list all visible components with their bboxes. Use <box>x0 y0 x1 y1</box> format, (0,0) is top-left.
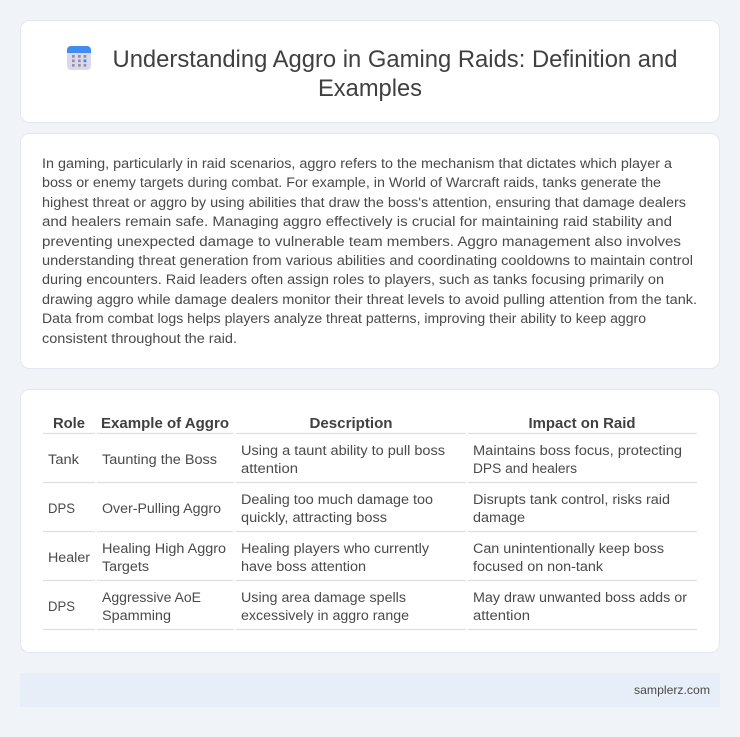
table row: dps aoe: Using area damage spells <box>241 590 406 606</box>
panel: intro paragraph <box>20 134 720 368</box>
text block: aggro explanation <box>42 156 697 347</box>
table row: dps aoe: Spamming <box>102 608 171 624</box>
table header: Example of Aggro <box>101 415 229 432</box>
table header: Role <box>53 415 85 432</box>
table row: dps over-pulling: quickly, attracting boss <box>241 510 387 526</box>
table row: dps over-pulling: Disrupts tank control, risks raid <box>473 492 670 508</box>
title: Examples <box>318 75 422 102</box>
text block: aggro explanation: In gaming, particularly in raid scenarios, aggro refers to the mechanism that dictates which player a <box>42 156 672 172</box>
text block: aggro explanation: during encounters. Raid leaders often assign roles to players, such as tanks focusing primarily on <box>42 272 664 288</box>
table row: healer: Healing High Aggro <box>102 541 226 557</box>
title <box>112 46 678 102</box>
table row: dps over-pulling: damage <box>473 510 525 526</box>
table header: Impact on Raid <box>528 415 636 432</box>
table row: dps aoe: DPS <box>48 599 75 614</box>
table row: healer: focused on non-tank <box>473 559 604 575</box>
icon: calendar <box>67 46 91 70</box>
table row: dps aoe: May draw unwanted boss adds or <box>473 590 687 606</box>
table row: tank: DPS and healers <box>473 461 577 477</box>
table row: healer: Targets <box>102 559 149 575</box>
title: Understanding Aggro in Gaming Raids: Definition and <box>112 46 678 73</box>
table row: dps aoe: excessively in aggro range <box>241 608 409 624</box>
table row: tank: Using a taunt ability to pull boss <box>241 443 445 459</box>
text block: aggro explanation: Data from combat logs helps players analyze threat patterns, improving their ability to keep aggro <box>42 311 646 327</box>
table row: healer: Healing players who currently <box>241 541 430 557</box>
table row: dps over-pulling <box>48 492 670 526</box>
table row: dps over-pulling: Dealing too much damage too <box>241 492 433 508</box>
footer: samplerz.com <box>634 683 710 697</box>
table row: healer: have boss attention <box>241 559 366 575</box>
table header <box>53 415 636 432</box>
table row: healer: Can unintentionally keep boss <box>473 541 664 557</box>
table row: dps aoe: Aggressive AoE <box>102 590 201 606</box>
table row: healer: Healer <box>48 550 90 566</box>
text block: aggro explanation: preventing unexpected damage to vulnerable team members. Aggro management also involves <box>42 234 681 250</box>
table row: tank: Taunting the Boss <box>102 452 217 468</box>
table row: dps aoe: attention <box>473 608 530 624</box>
footer <box>20 673 720 707</box>
text block: aggro explanation: drawing aggro while damage dealers monitor their threat levels to avoid pulling attention from the tank. <box>42 292 697 308</box>
table row: dps over-pulling: DPS <box>48 501 75 516</box>
table row: tank: Maintains boss focus, protecting <box>473 443 682 459</box>
table row: tank: Tank <box>48 452 80 468</box>
table header: Description <box>310 415 392 432</box>
table row: tank <box>48 443 682 477</box>
table row: healer <box>48 541 664 575</box>
text block: aggro explanation: understanding threat generation from various abilities and coordinating cooldowns to maintain control <box>42 253 693 269</box>
panel: table <box>20 390 720 652</box>
text block: aggro explanation: boss or enemy targets during combat. For example, in World of Warcraft raids, tanks generate the <box>42 175 661 191</box>
text block: aggro explanation: consistent throughout the raid. <box>42 331 237 347</box>
table row: dps aoe <box>48 590 687 624</box>
table row: tank: attention <box>241 461 298 477</box>
text block: aggro explanation: and healers remain safe. Managing aggro effectively is crucial for maintaining raid stability and <box>42 214 672 230</box>
panel: title header <box>20 20 720 122</box>
text block: aggro explanation: highest threat or aggro by using abilities that draw the boss's attention, ensuring that damage dealers <box>42 195 686 211</box>
table row: dps over-pulling: Over-Pulling Aggro <box>102 501 221 517</box>
